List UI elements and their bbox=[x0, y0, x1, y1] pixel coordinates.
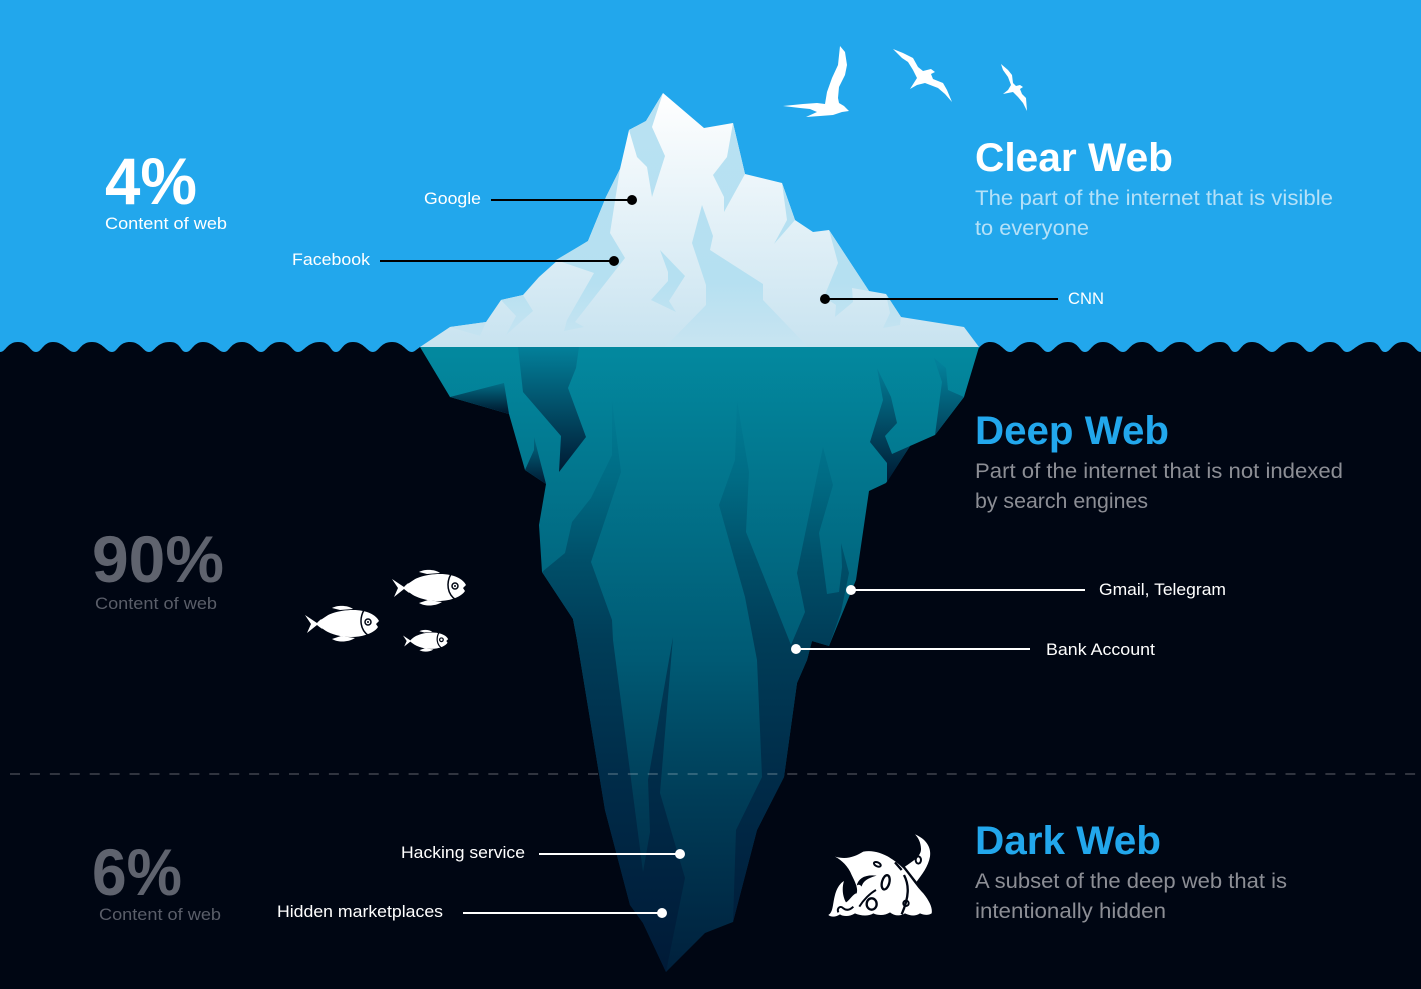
callout: Facebook: Facebook bbox=[292, 250, 371, 269]
section: Dark Web: A subset of the deep web that is bbox=[975, 870, 1287, 893]
callout: Bank Account bbox=[791, 640, 1155, 659]
stat: 6%: 6% bbox=[92, 835, 182, 909]
section: Clear Web bbox=[975, 136, 1333, 240]
section: Dark Web bbox=[975, 819, 1287, 923]
stat: 4% bbox=[105, 144, 227, 233]
section: Deep Web bbox=[975, 409, 1343, 513]
stat: 6%: Content of web bbox=[99, 905, 221, 924]
callout: CNN bbox=[820, 289, 1104, 308]
stat: 90%: Content of web bbox=[95, 594, 217, 613]
iceberg: above water bbox=[420, 93, 979, 347]
callout: CNN: CNN bbox=[1068, 289, 1104, 308]
stat: 4%: Content of web bbox=[105, 214, 227, 233]
stat: 90%: 90% bbox=[92, 522, 224, 596]
sky and wavy waterline bbox=[0, 0, 1421, 352]
callout: Hidden marketplaces bbox=[277, 902, 667, 921]
section: Deep Web: Part of the internet that is not indexed bbox=[975, 460, 1343, 483]
icons: fish bbox=[305, 570, 466, 652]
section: Dark Web: intentionally hidden bbox=[975, 900, 1166, 923]
icons: birds bbox=[783, 46, 1027, 117]
callout: Hacking service bbox=[401, 843, 685, 862]
section: Clear Web: Clear Web bbox=[975, 136, 1173, 180]
callout: Gmail, Telegram: Gmail, Telegram bbox=[1099, 580, 1226, 599]
section: Clear Web: to everyone bbox=[975, 217, 1089, 240]
callout: Hidden marketplaces: Hidden marketplaces bbox=[277, 902, 443, 921]
callout: Hacking service: Hacking service bbox=[401, 843, 525, 862]
divider between deep and dark web bbox=[10, 773, 1421, 775]
iceberg: below water bbox=[420, 347, 979, 972]
section: Deep Web: Deep Web bbox=[975, 409, 1169, 453]
stat: 4%: 4% bbox=[105, 144, 197, 218]
callout: Gmail, Telegram bbox=[846, 580, 1226, 599]
callout: Google: Google bbox=[424, 189, 481, 208]
stat: 6% bbox=[92, 835, 221, 924]
section: Clear Web: The part of the internet that is visible bbox=[975, 187, 1333, 210]
section: Deep Web: by search engines bbox=[975, 490, 1148, 513]
icon: kraken bbox=[828, 834, 932, 917]
section: Dark Web: Dark Web bbox=[975, 819, 1161, 863]
callout: Facebook bbox=[292, 250, 619, 269]
callout: Google bbox=[424, 189, 637, 208]
callout: Bank Account: Bank Account bbox=[1046, 640, 1155, 659]
